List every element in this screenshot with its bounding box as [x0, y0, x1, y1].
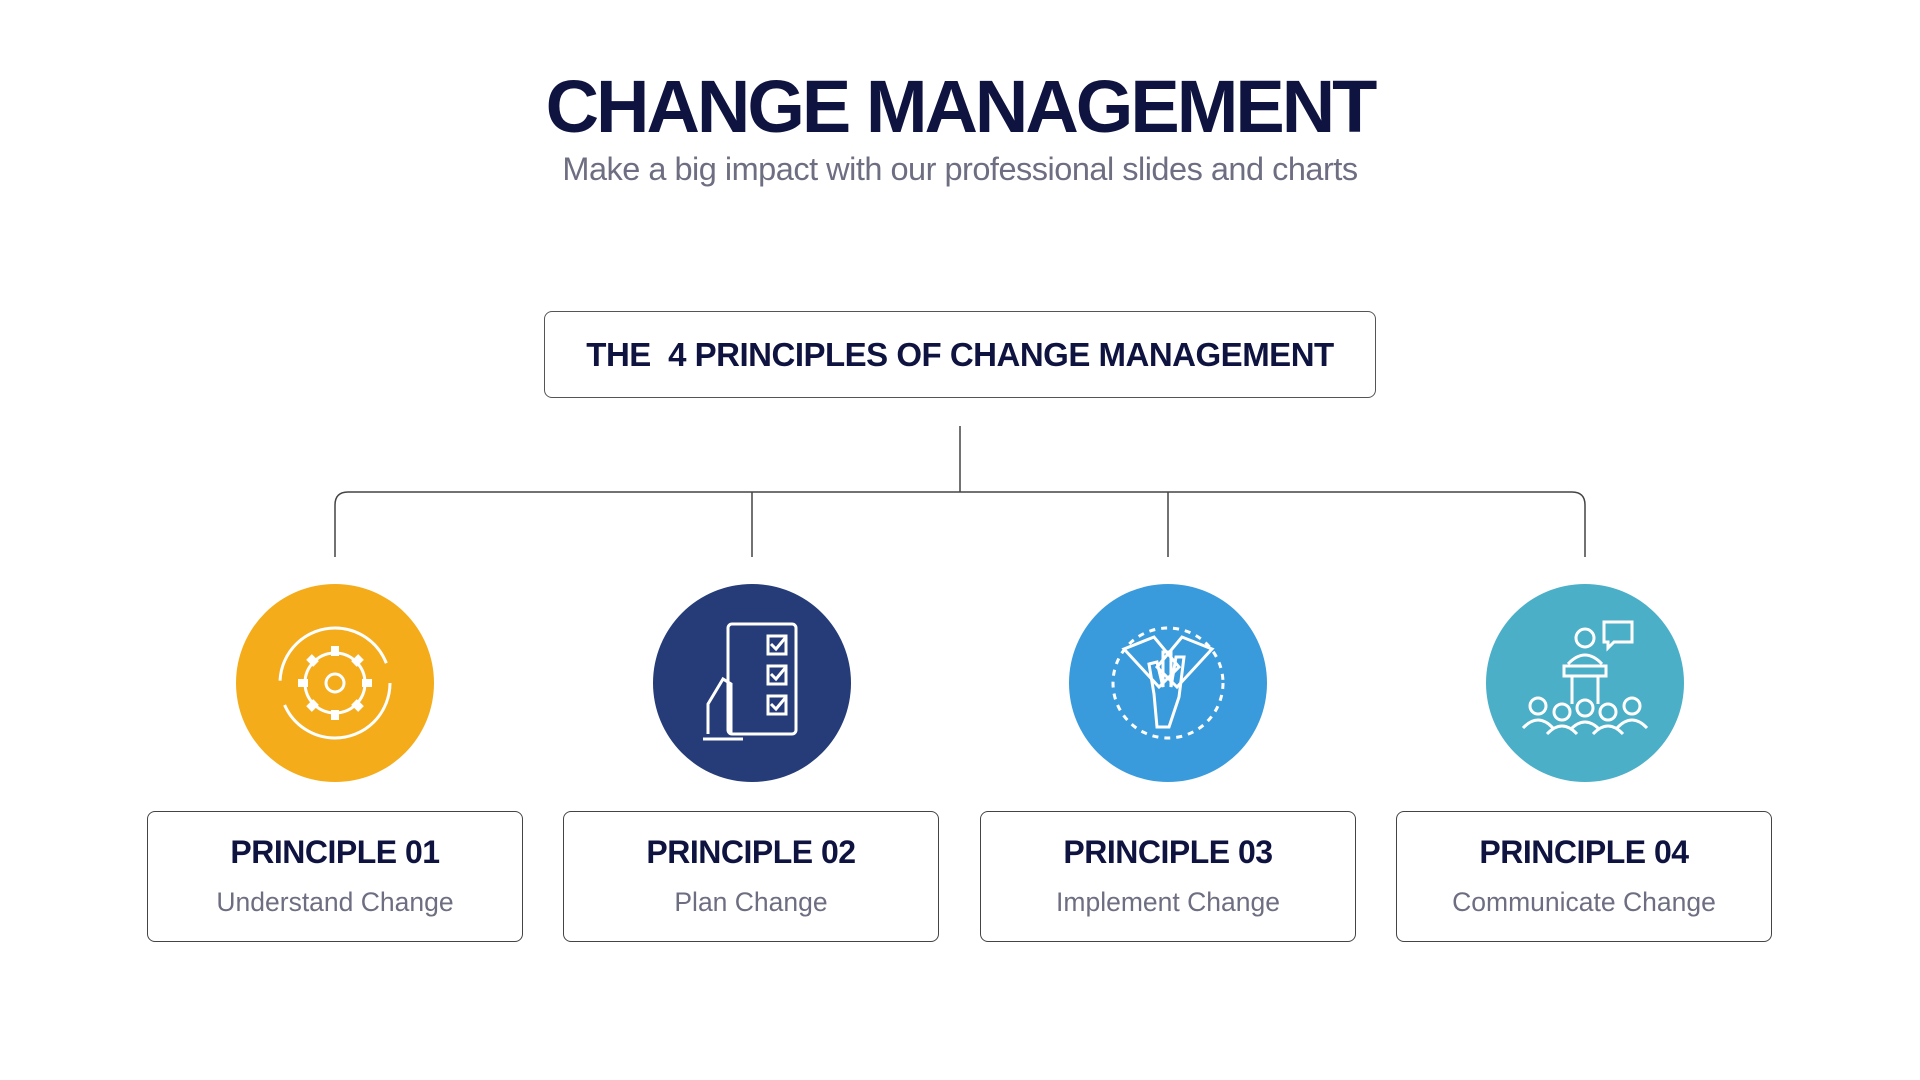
card: principle 03: Implement Change — [1056, 887, 1280, 917]
card: principle 03: PRINCIPLE 03 — [1063, 834, 1273, 870]
icon: presenter circle — [1486, 584, 1684, 782]
title: CHANGE MANAGEMENT — [546, 65, 1374, 148]
icon: gear circle — [236, 584, 434, 782]
card: principle 01 — [147, 811, 523, 942]
card: principle 04: Communicate Change — [1452, 887, 1716, 917]
subtitle: Make a big impact with our professional slides and charts — [562, 151, 1358, 187]
card: principle 04: PRINCIPLE 04 — [1479, 834, 1689, 870]
card: principle 03 — [980, 811, 1356, 942]
card: principle 01: Understand Change — [216, 887, 454, 917]
main heading box — [544, 311, 1376, 398]
main heading box: THE 4 PRINCIPLES OF CHANGE MANAGEMENT — [586, 336, 1334, 373]
card: principle 02: PRINCIPLE 02 — [646, 834, 856, 870]
icon: hands circle — [1069, 584, 1267, 782]
card: principle 04 — [1396, 811, 1772, 942]
card: principle 02: Plan Change — [674, 887, 828, 917]
card: principle 01: PRINCIPLE 01 — [230, 834, 440, 870]
icon: checklist circle — [653, 584, 851, 782]
card: principle 02 — [563, 811, 939, 942]
